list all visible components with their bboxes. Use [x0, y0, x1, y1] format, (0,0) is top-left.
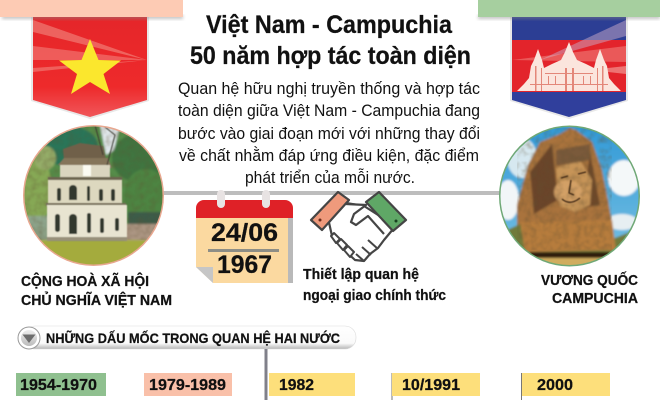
- country label: Vietnam: [21, 272, 172, 309]
- icon: handshake: [311, 192, 406, 261]
- country label: Cambodia: VƯƠNG QUỐC: [541, 271, 638, 289]
- flag: Vietnam: [31, 17, 149, 119]
- country label: Cambodia: CAMPUCHIA: [552, 291, 639, 307]
- title: [190, 11, 471, 70]
- top bar: green: [478, 0, 660, 19]
- top bar: peach: [0, 0, 183, 19]
- intro paragraph: Quan hệ hữu nghị truyền thống và hợp tác: [178, 80, 480, 98]
- section heading pill: [18, 326, 356, 349]
- intro paragraph: toàn diện giữa Việt Nam - Campuchia đang: [178, 102, 480, 120]
- milestone: 2000: [521, 373, 610, 400]
- flag: Cambodia: [510, 17, 628, 119]
- country label: Vietnam: CỘNG HOÀ XÃ HỘI: [21, 272, 149, 290]
- caption: establishing diplomatic relations: Thiết lập quan hệ: [303, 266, 419, 283]
- intro paragraph: về chất nhằm đáp ứng điều kiện, đặc điểm: [179, 146, 479, 165]
- milestone: 2000: 2000: [537, 377, 573, 394]
- timeline vertical axis: [264, 349, 268, 400]
- milestone: 1954-1970: 1954-1970: [20, 377, 97, 394]
- milestone: 1979-1989: 1979-1989: [149, 377, 226, 394]
- milestone: 10/1991: [392, 373, 480, 400]
- photo: Turtle Tower, Hanoi: [23, 125, 164, 266]
- title: Việt Nam - Campuchia: [206, 11, 453, 39]
- title: 50 năm hợp tác toàn diện: [190, 42, 471, 70]
- country label: Vietnam: CHỦ NGHĨA VIỆT NAM: [21, 291, 172, 309]
- milestone: 1982: 1982: [279, 377, 314, 394]
- photo: Bayon temple, Cambodia: [499, 126, 640, 266]
- intro paragraph: bước vào giai đoạn mới với những thay đổi: [178, 125, 480, 143]
- caption: establishing diplomatic relations: ngoại giao chính thức: [303, 287, 446, 304]
- milestone: 1979-1989: [144, 373, 232, 396]
- timeline connector line: [160, 191, 502, 195]
- country label: Cambodia: [541, 271, 639, 307]
- calendar: 24/06/1967: 24/06: [211, 219, 278, 247]
- milestone: 1954-1970: [16, 373, 106, 396]
- caption: establishing diplomatic relations: [303, 266, 446, 304]
- section heading pill: NHỮNG DẤU MỐC TRONG QUAN HỆ HAI NƯỚC: [46, 329, 340, 346]
- milestone: 1982: [269, 373, 355, 396]
- calendar: 24/06/1967: [196, 190, 293, 283]
- intro paragraph: [178, 80, 480, 187]
- intro paragraph: phát triển của mỗi nước.: [245, 168, 415, 187]
- milestone: 10/1991: 10/1991: [402, 377, 460, 394]
- calendar: 24/06/1967: 1967: [217, 251, 272, 279]
